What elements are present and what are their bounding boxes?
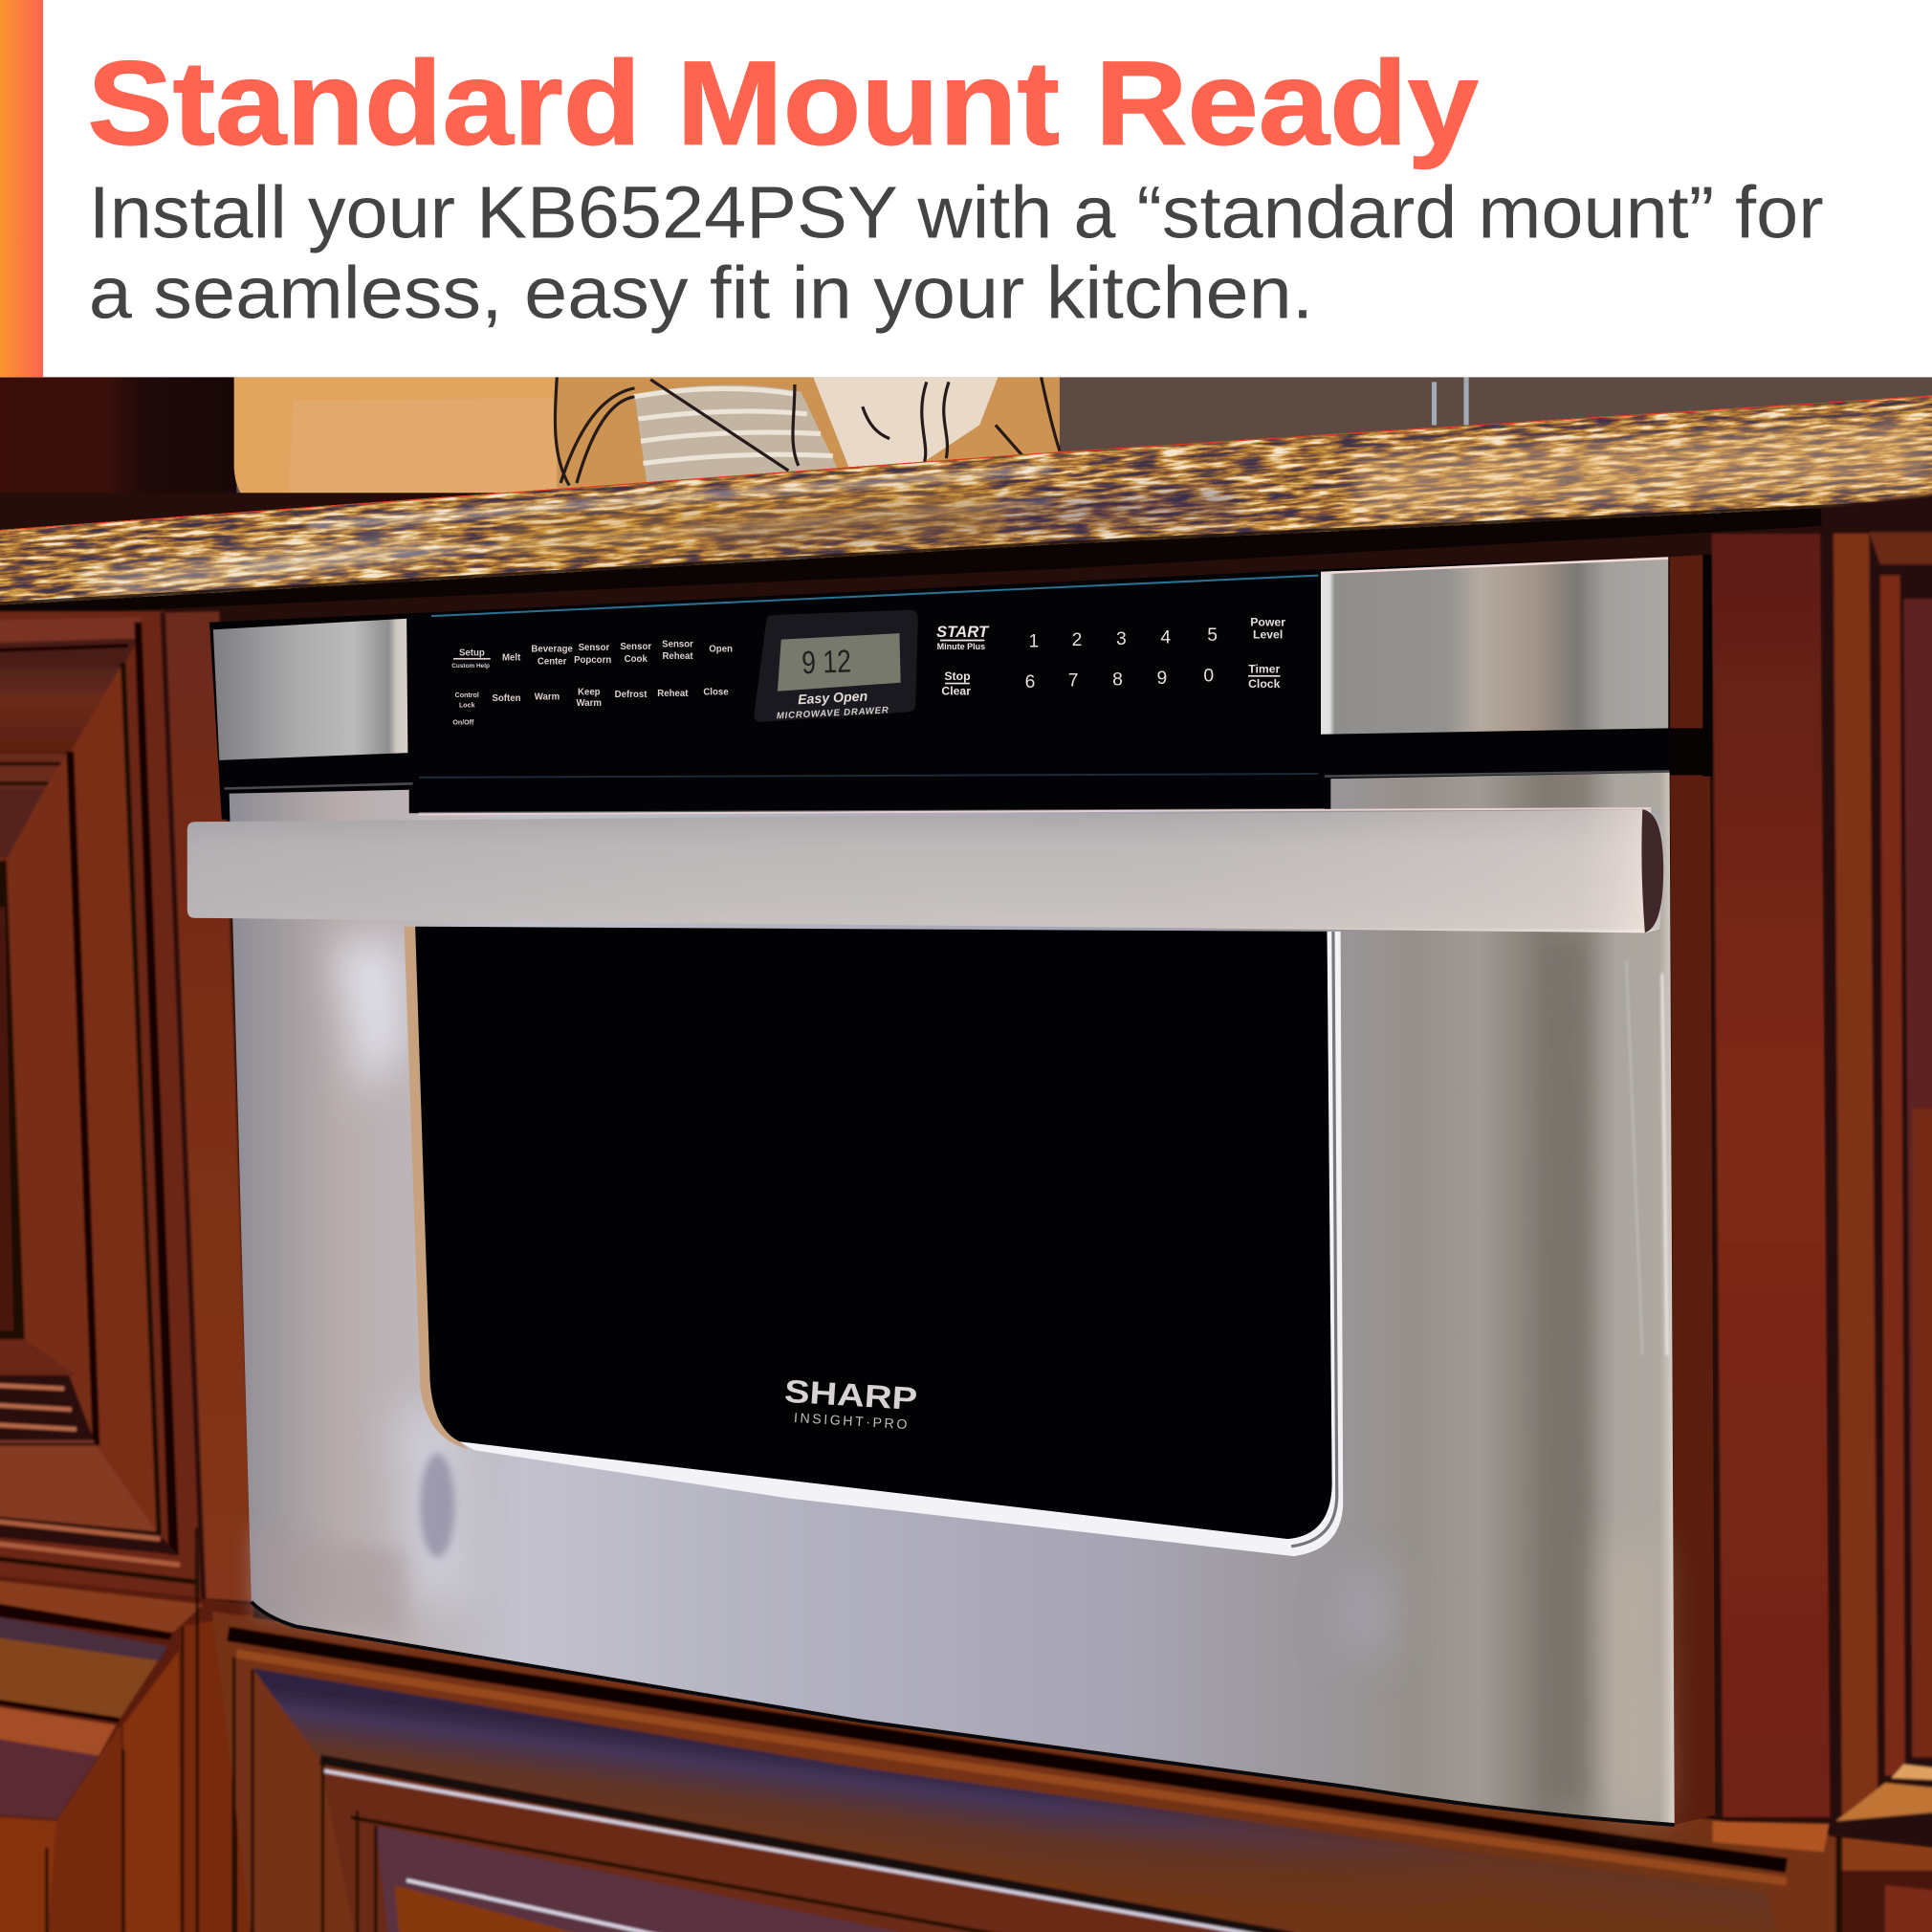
Insight Pro tagline: INSIGHT·PRO <box>793 1411 910 1433</box>
left steel trim <box>213 619 407 760</box>
header panel <box>0 0 1932 377</box>
inner mouldings <box>0 754 67 788</box>
number keys <box>1025 626 1218 692</box>
accent stripe <box>0 0 43 377</box>
power timer labels: Power <box>1250 615 1285 628</box>
power timer labels <box>1248 615 1285 691</box>
lower center drawer cabinet <box>212 1612 1932 1932</box>
function button labels: Defrost <box>615 690 648 700</box>
display window <box>754 610 918 722</box>
function button labels: Cook <box>625 654 648 665</box>
function button labels: Warm <box>577 698 602 709</box>
start stop labels: Minute Plus <box>937 642 985 651</box>
LCD screen <box>778 633 901 692</box>
number keys: 7 <box>1068 671 1078 692</box>
title: Standard Mount Ready <box>87 37 1479 170</box>
number keys: 3 <box>1116 629 1127 649</box>
number keys: 1 <box>1028 631 1039 651</box>
left lower door <box>0 1527 253 1932</box>
start stop labels: Stop <box>944 670 971 683</box>
left stile <box>165 611 253 1602</box>
steel reflections <box>252 943 1667 1817</box>
number keys: 4 <box>1160 627 1171 648</box>
right bottom section <box>1713 1821 1830 1852</box>
door grooves <box>134 623 179 1555</box>
function button labels: Warm <box>535 692 560 703</box>
right steel side strip <box>1670 555 1715 1825</box>
function button labels: Lock <box>459 701 475 709</box>
drawer handle <box>187 808 1663 933</box>
mouldings <box>228 1634 1787 1865</box>
white cup <box>813 377 998 471</box>
start stop labels <box>936 623 990 698</box>
window rim <box>405 927 1343 1556</box>
function button labels: Setup <box>459 648 485 658</box>
countertop granite <box>0 396 1932 604</box>
number keys: 5 <box>1207 626 1218 646</box>
start stop labels: START <box>936 623 990 641</box>
function button labels: Soften <box>492 693 521 704</box>
Easy Open label: Easy Open <box>798 689 868 708</box>
LCD reading: 9 12 <box>801 645 851 681</box>
function button labels: On/Off <box>452 719 474 727</box>
function button labels: Close <box>703 688 729 698</box>
number keys: 2 <box>1072 630 1082 650</box>
function button labels: Reheat <box>662 651 693 662</box>
function button labels: Sensor <box>579 643 610 653</box>
start stop labels: Clear <box>941 685 971 698</box>
lower door mouldings <box>0 1516 179 1555</box>
function button labels: Reheat <box>657 689 689 699</box>
function button labels: Sensor <box>620 642 651 652</box>
function button labels: Sensor <box>662 639 693 649</box>
wire stand <box>555 377 1060 486</box>
power timer labels: Clock <box>1248 677 1281 691</box>
background behind counter <box>0 377 1932 494</box>
function button labels: Popcorn <box>574 655 611 666</box>
subtitle <box>89 172 1824 334</box>
left upper door <box>0 611 206 1599</box>
function button labels: Custom Help <box>451 663 490 670</box>
cabinet base <box>0 493 1932 1932</box>
handle end cap <box>1641 809 1663 933</box>
subtitle: Install your KB6524PSY with a “standard mount” for <box>89 172 1824 254</box>
Microwave Drawer label: MICROWAVE DRAWER <box>777 705 889 722</box>
power timer labels: Level <box>1253 627 1283 641</box>
plates <box>633 385 841 483</box>
drawer front <box>230 773 1675 1825</box>
number keys: 8 <box>1112 670 1123 690</box>
subtitle: a seamless, easy fit in your kitchen. <box>89 252 1313 334</box>
number keys: 6 <box>1025 672 1035 692</box>
control panel <box>209 557 1670 820</box>
function button labels: Beverage <box>531 644 574 654</box>
function button labels <box>451 639 733 727</box>
right door <box>1821 493 1932 1848</box>
SHARP logo: SHARP <box>783 1374 918 1417</box>
power timer labels: Timer <box>1248 662 1281 675</box>
black strip beside trim <box>1670 555 1713 777</box>
function button labels: Center <box>538 656 567 667</box>
number keys: 9 <box>1156 669 1167 689</box>
number keys: 0 <box>1203 666 1214 686</box>
right steel trim <box>1321 559 1668 735</box>
function button labels: Open <box>709 644 733 654</box>
raised panel bevels <box>69 667 157 1531</box>
function button labels: Keep <box>578 688 601 698</box>
function button labels: Control <box>455 692 479 699</box>
function button labels: Melt <box>502 653 521 664</box>
wall glass glints <box>1435 377 1466 425</box>
drawer window glass <box>405 927 1343 1556</box>
right cabinet stile <box>1711 534 1831 1817</box>
